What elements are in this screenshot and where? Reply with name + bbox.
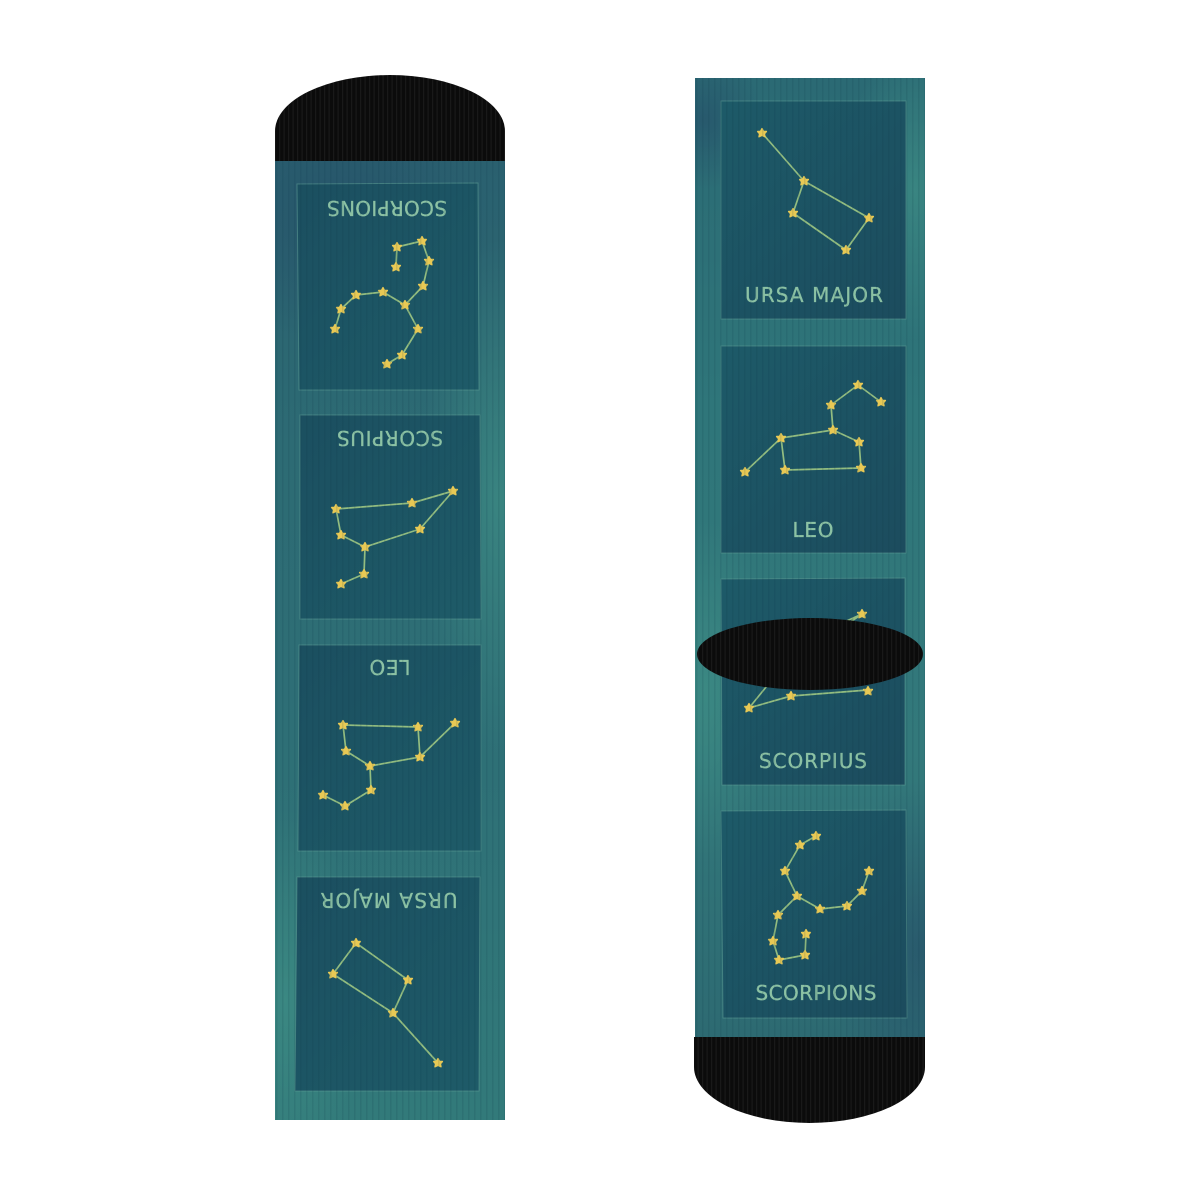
constellation: Scorpius [745, 610, 872, 712]
black toe cap [275, 75, 505, 161]
sock: left, sole up, upside-down design [275, 75, 505, 1120]
constellation: Leo [741, 381, 885, 476]
panel: Leo [298, 645, 481, 851]
black toe cap [694, 1037, 925, 1123]
right sock body [695, 78, 925, 1037]
panel: Ursa Major [721, 101, 906, 319]
label: Scorpius: SCORPIUS [759, 749, 867, 773]
panel: Scorpions [721, 810, 907, 1018]
panel: Ursa Major [295, 877, 480, 1091]
label: Ursa Major: URSA MAJOR [745, 283, 883, 307]
constellation: Leo [319, 719, 459, 810]
label: Scorpius: SCORPIUS [337, 426, 443, 450]
constellation: Ursa Major [758, 129, 873, 254]
label: Leo: LEO [370, 655, 410, 679]
constellation: Scorpions [769, 832, 873, 964]
panel: Leo [721, 346, 906, 553]
label: Scorpions: SCORPIONS [327, 196, 447, 220]
constellation: Ursa Major [329, 939, 442, 1067]
constellation: Scorpions [331, 237, 433, 368]
constellation: Scorpius [332, 487, 457, 588]
panel: Scorpions [297, 183, 479, 390]
label: Leo: LEO [792, 518, 834, 542]
knit texture overlay [695, 78, 925, 1040]
label: Scorpions: SCORPIONS [756, 981, 876, 1005]
sock: right, design upright [694, 78, 925, 1123]
black heel patch [697, 618, 923, 690]
knit texture overlay [275, 158, 505, 1120]
left sock body [275, 161, 505, 1120]
panel: Scorpius [300, 415, 481, 619]
panel: Scorpius [721, 578, 905, 785]
label: Ursa Major: URSA MAJOR [320, 888, 458, 912]
